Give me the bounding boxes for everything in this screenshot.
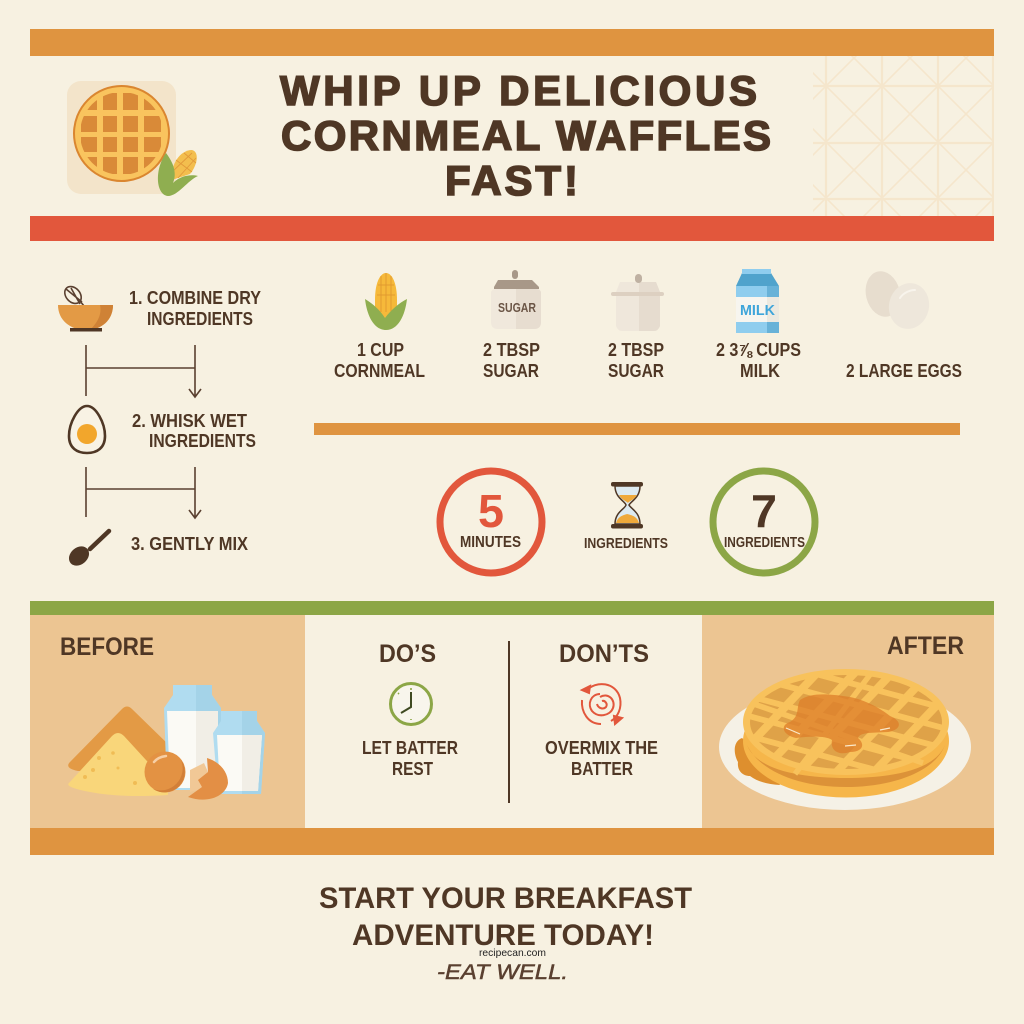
heading: before: BEFORE bbox=[60, 633, 154, 661]
arrow: step 2 to 3 bbox=[86, 467, 201, 518]
heading: don'ts: DON’TS bbox=[559, 640, 649, 668]
stat: hourglass ingredients bbox=[584, 482, 668, 552]
icon: swirl with arrows bbox=[582, 684, 622, 724]
call to action: START YOUR BREAKFAST bbox=[319, 882, 692, 915]
stat: hourglass ingredients: INGREDIENTS bbox=[584, 536, 668, 552]
title: FAST! bbox=[445, 157, 578, 204]
bottom orange bar bbox=[30, 828, 994, 855]
text: eggs: 2 LARGE EGGS bbox=[846, 361, 962, 381]
title bbox=[280, 67, 771, 204]
text: step 2: 2. WHISK WET bbox=[132, 410, 248, 431]
title: CORNMEAL WAFFLES bbox=[281, 112, 771, 159]
call to action bbox=[319, 882, 692, 952]
panel: after bbox=[702, 615, 994, 828]
watermark: recipecan.com bbox=[479, 947, 546, 959]
icon: hourglass bbox=[611, 482, 643, 528]
icon: milk carton bbox=[736, 269, 779, 333]
panel: steps bbox=[58, 283, 262, 570]
text: let batter rest: LET BATTER bbox=[362, 738, 458, 758]
text: sugar 1: 2 TBSP bbox=[483, 340, 540, 360]
icon: egg bbox=[69, 406, 105, 453]
stat: 7 ingredients: INGREDIENTS bbox=[724, 535, 805, 551]
icon: waffle logo with corn bbox=[67, 81, 198, 196]
text: overmix the batter: OVERMIX THE bbox=[545, 738, 658, 758]
illustration: waffle on plate bbox=[719, 669, 971, 810]
panel: ingredients: SUGAR bbox=[483, 361, 539, 381]
text: milk: 2 3⅞ CUPS bbox=[716, 340, 801, 360]
panel: don'ts: BATTER bbox=[571, 759, 633, 779]
stat: 7 ingredients bbox=[713, 471, 815, 573]
arrow: step 1 to 2 bbox=[86, 345, 201, 397]
heading: after: AFTER bbox=[887, 632, 964, 660]
icon: clock bbox=[390, 684, 432, 724]
text: sugar 2: 2 TBSP bbox=[608, 340, 664, 360]
center divider bbox=[508, 641, 510, 803]
panel: before bbox=[30, 615, 305, 828]
panel: do's: REST bbox=[392, 759, 433, 779]
icon: sugar jar: SUGAR bbox=[498, 300, 536, 315]
illustration: cornmeal, milk, eggs bbox=[68, 685, 265, 800]
heading: do's: DO’S bbox=[379, 640, 436, 668]
text: step 1: 1. COMBINE DRY bbox=[129, 287, 262, 308]
red bar bbox=[30, 216, 994, 241]
panel: do's bbox=[362, 640, 458, 779]
panel: steps: INGREDIENTS bbox=[149, 430, 256, 451]
call to action: ADVENTURE TODAY! bbox=[352, 919, 654, 952]
text: cornmeal: 1 CUP bbox=[357, 340, 404, 360]
panel: don'ts bbox=[545, 640, 658, 779]
icon: corn bbox=[365, 273, 407, 330]
stat: 7 ingredients: 7 bbox=[751, 485, 777, 537]
icon: sugar jar plain bbox=[611, 274, 664, 331]
panel: ingredients: CORNMEAL bbox=[334, 361, 425, 381]
stat: 5 minutes: 5 bbox=[478, 485, 504, 537]
icon: sugar jar bbox=[491, 270, 541, 329]
icon: milk carton: MILK bbox=[740, 302, 775, 319]
icon: spoon bbox=[65, 531, 109, 570]
panel: ingredients: MILK bbox=[740, 361, 780, 381]
icon: bowl and whisk bbox=[58, 283, 113, 332]
stat: 5 minutes: MINUTES bbox=[460, 534, 521, 551]
title: WHIP UP DELICIOUS bbox=[280, 67, 757, 114]
stat: 5 minutes bbox=[440, 471, 542, 573]
green bar bbox=[30, 601, 994, 615]
sign-off: -EAT WELL. bbox=[437, 961, 568, 984]
icon: eggs bbox=[861, 268, 933, 333]
panel: ingredients: SUGAR bbox=[608, 361, 664, 381]
panel: steps: INGREDIENTS bbox=[147, 308, 253, 329]
text: step 3: 3. GENTLY MIX bbox=[131, 533, 249, 554]
orange divider bbox=[314, 423, 960, 435]
top orange bar bbox=[30, 29, 994, 56]
panel: ingredients bbox=[334, 268, 962, 381]
lattice pattern bbox=[813, 56, 994, 216]
